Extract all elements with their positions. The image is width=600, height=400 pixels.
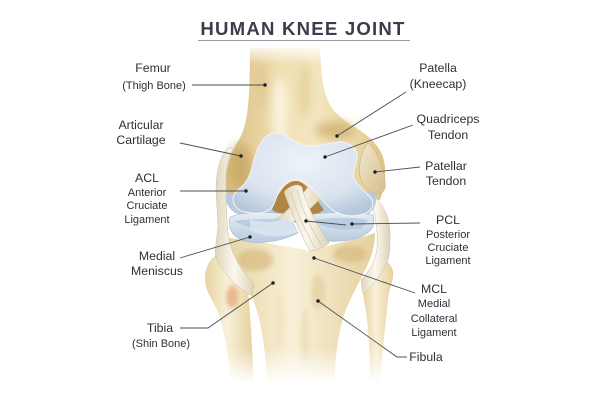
label: tibia: (Shin Bone) [132,338,190,350]
label: quadriceps tendon [417,112,479,142]
leader: quadriceps tendon [323,125,413,159]
label: quadriceps tendon: Quadriceps [417,112,479,126]
tibial plateau cartilage right [308,212,374,241]
label: MCL: Medial [418,298,450,310]
leader: medial meniscus [180,235,252,258]
label: quadriceps tendon: Tendon [428,128,468,142]
medial collateral strip, left [215,147,254,296]
label: patellar tendon: Patellar [425,159,467,173]
label: articular cartilage [116,118,166,147]
PCL band [277,184,323,223]
ACL band [284,185,329,251]
patella [359,143,385,193]
label: ACL [124,171,170,226]
bruise tint [226,286,238,308]
lateral collateral strip, right [361,197,390,294]
label: patellar tendon: Tendon [426,174,466,188]
leader: articular cartilage [180,143,243,158]
label: femur: (Thigh Bone) [122,80,186,92]
leader: MCL [312,256,415,293]
label: ACL: ACL [135,171,159,185]
intercondylar notch [272,181,324,225]
meniscus crossing band [250,216,298,236]
label: PCL [425,213,471,267]
femur [226,48,385,205]
label: tibia: Tibia [147,321,173,335]
label: MCL: MCL [421,282,447,296]
label: medial meniscus [131,249,183,278]
leader: PCL [304,219,420,226]
label: femur [122,61,186,92]
femoral posterior cartilage [226,192,376,218]
fade top and bottom [240,44,330,64]
tibia mottling [237,245,367,363]
fibula bone, left [205,256,254,382]
femoral cartilage [233,133,373,216]
leader: tibia [180,281,275,328]
fibula bone, right [362,261,393,382]
label: patella [410,61,466,91]
knee illustration [200,44,395,383]
leader: fibula [316,299,407,357]
tibial plateau cartilage left [229,212,298,243]
label: PCL: Ligament [425,255,471,267]
label: ACL: Cruciate [127,200,167,212]
label: PCL: Cruciate [428,242,468,254]
label: patella: (Kneecap) [410,77,466,91]
label: tibia [132,321,190,350]
leader: patella [335,92,406,138]
title: HUMAN KNEE JOINT [200,18,406,39]
label: PCL: PCL [436,213,460,227]
label: patellar tendon [425,159,467,188]
label: articular cartilage: Articular [118,118,164,132]
label: MCL: Ligament [411,327,457,339]
label: medial meniscus: Meniscus [131,264,183,278]
label: patella: Patella [419,61,457,75]
label: femur: Femur [135,61,171,75]
label: medial meniscus: Medial [139,249,175,263]
label: ACL: Anterior [128,187,167,199]
label: ACL: Ligament [124,214,170,226]
label: articular cartilage: Cartilage [116,133,166,147]
label: MCL [411,282,457,339]
leader: femur [192,83,267,87]
label: fibula: Fibula [409,350,443,364]
label: MCL: Collateral [411,313,457,325]
leader: patellar tendon [373,167,420,174]
leader: ACL [180,189,248,193]
tibia [225,233,375,382]
label: PCL: Posterior [426,229,470,241]
femur highlights [229,60,355,192]
